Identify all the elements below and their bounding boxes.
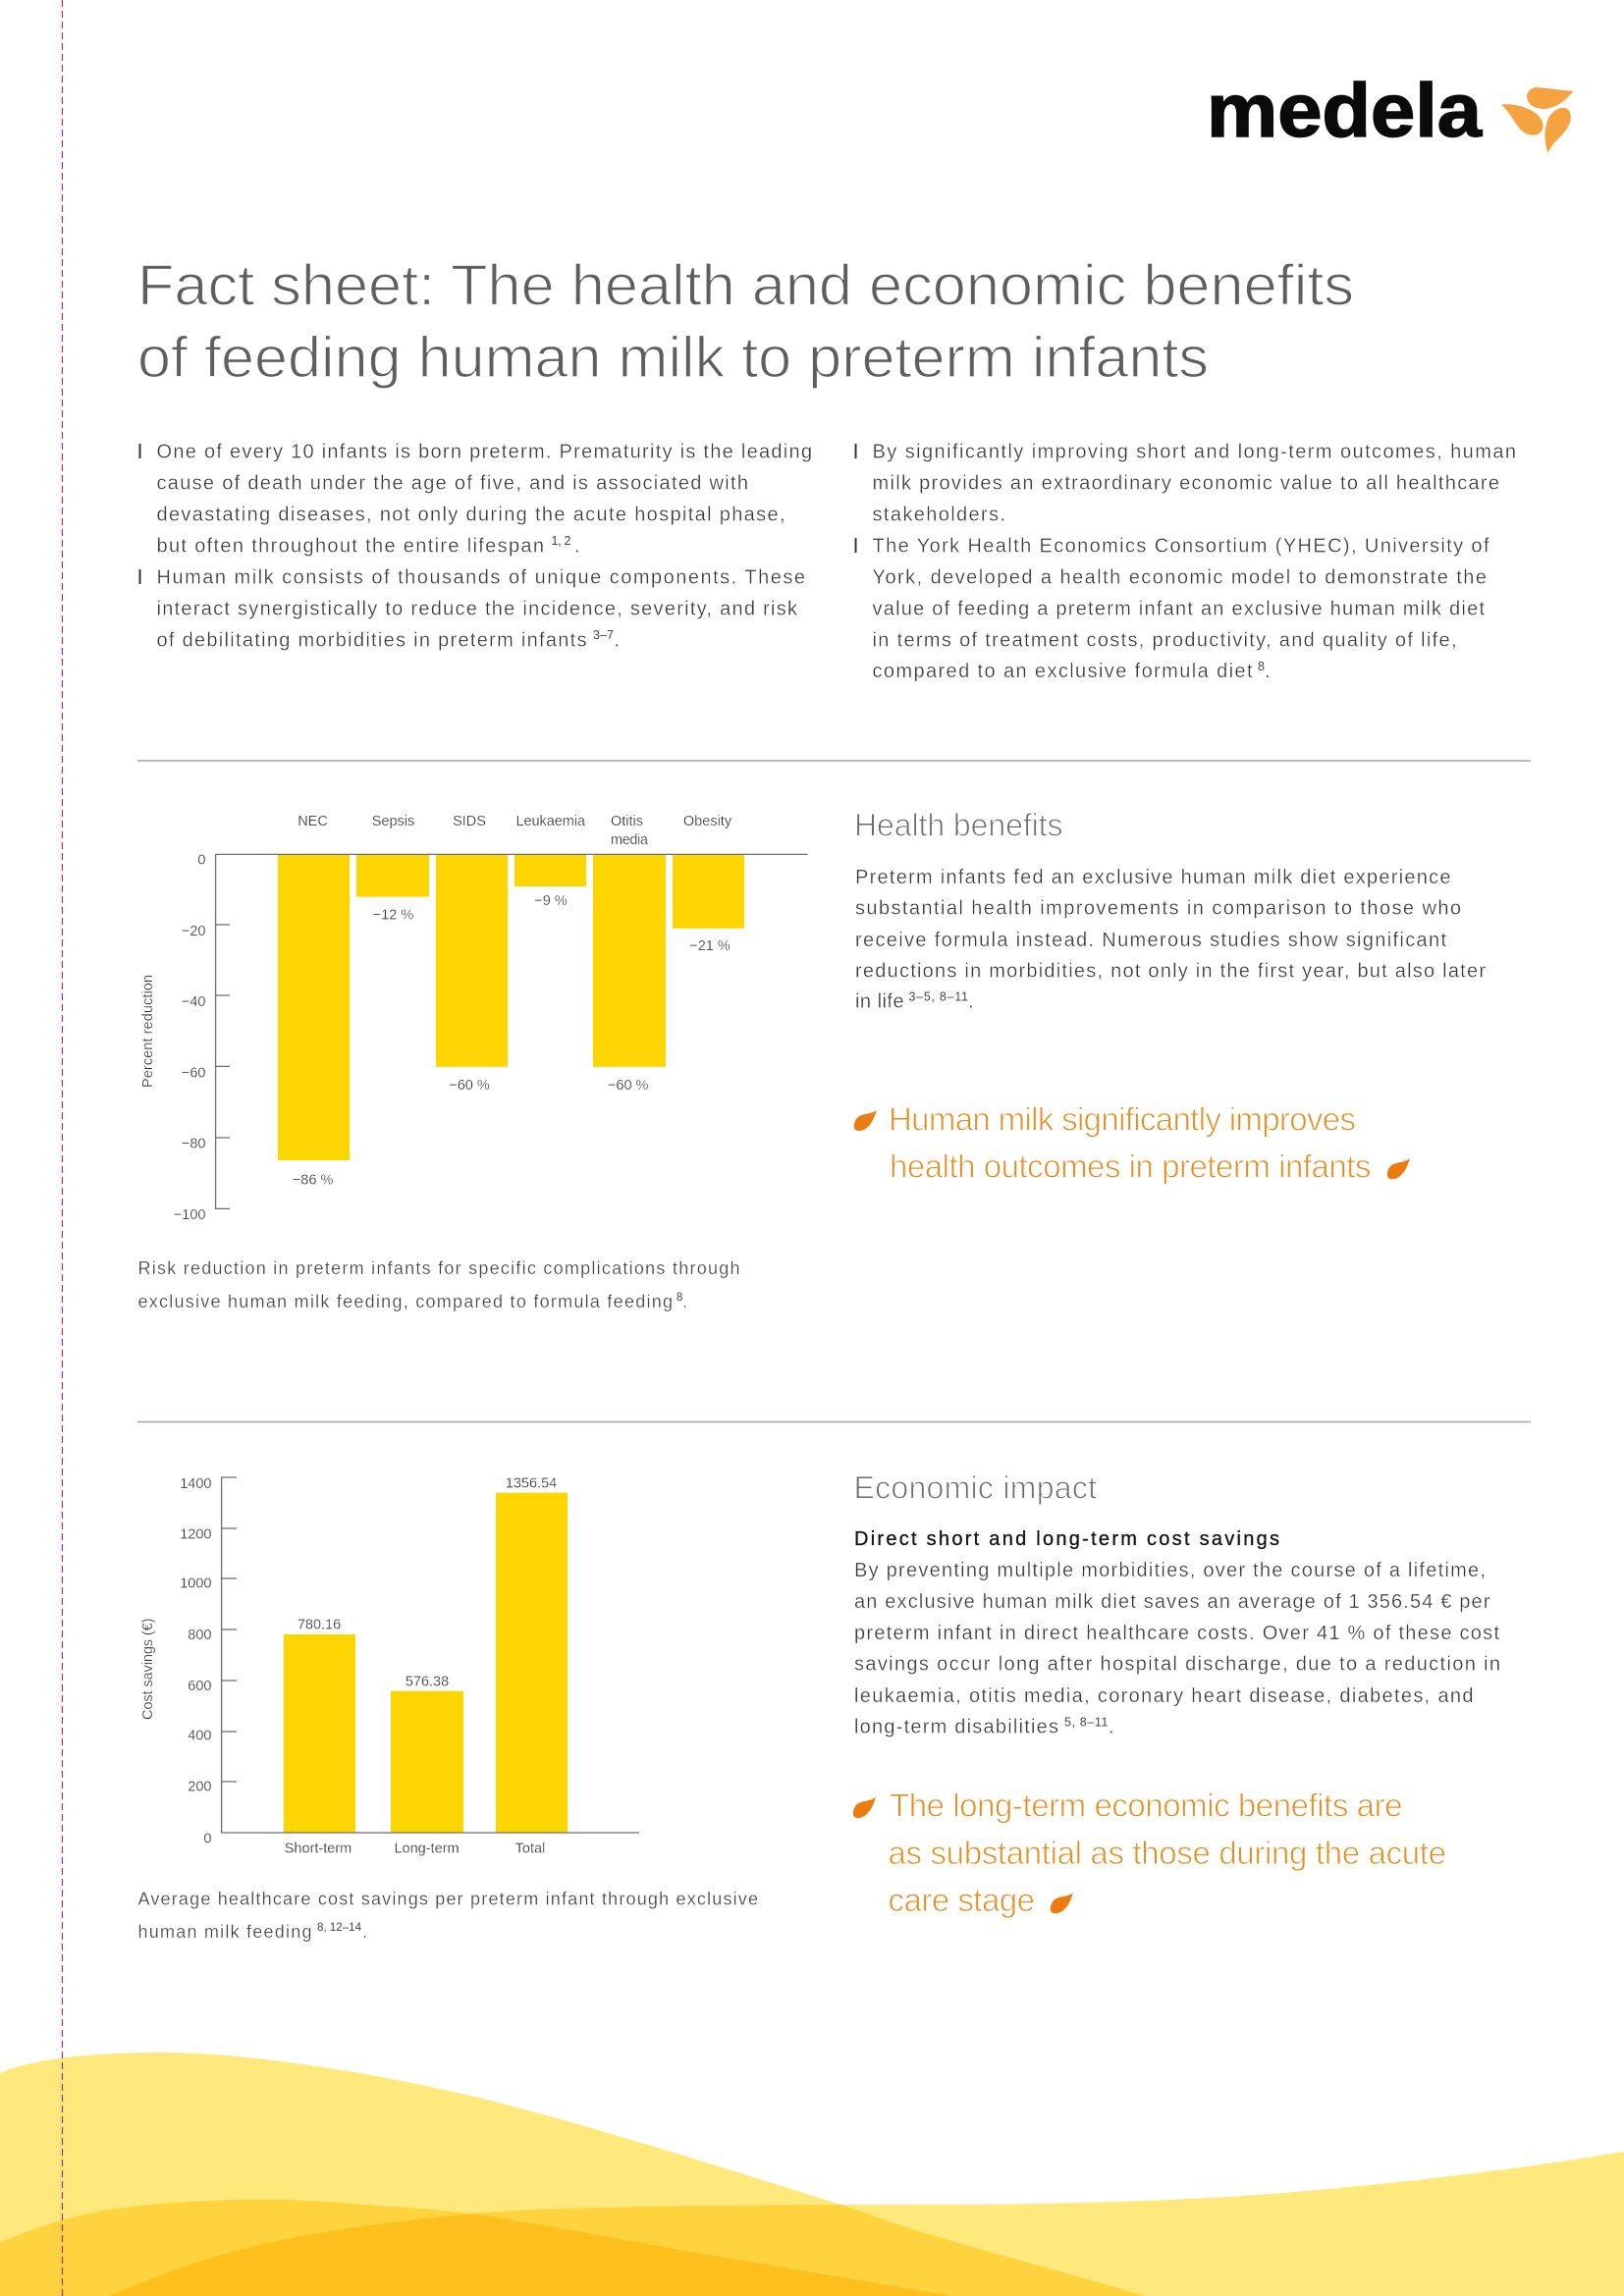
intro text: left column: 1, 2 [552,534,571,548]
chart caption: risk reduction: 8 [677,1292,682,1304]
icon: leaf [1051,1893,1073,1913]
y axis title: Cost savings (€) [140,1618,156,1720]
intro text: left column: but often throughout the entire lifespan [157,536,544,558]
category labels: Leukaemia [516,814,586,829]
category labels: Sepsis [372,814,414,829]
y axis labels: −80 [182,1137,206,1152]
value labels: −60 % [608,1078,649,1094]
y axis labels: 800 [188,1628,212,1643]
intro text: left column: devastating diseases, not only during the acute hospital phase, [157,505,785,526]
category labels [285,1841,545,1856]
text: health benefits [855,867,1486,1013]
y axis labels: 600 [188,1679,212,1694]
chart caption: cost savings: . [362,1922,367,1942]
y axis labels: −100 [174,1207,206,1223]
callout: human milk improves outcomes [854,1101,1410,1184]
category labels: media [611,832,649,848]
text: economic impact: long-term disabilities [854,1717,1058,1738]
bars: percent reduction per condition [278,854,744,1160]
intro text: left column [139,442,812,651]
category labels: Short-term [285,1841,352,1856]
value labels: −9 % [534,893,568,909]
bars: cost savings [284,1493,568,1833]
text: health benefits: substantial health improvements in comparison to those who [855,898,1461,920]
text: economic impact: leukaemia, otitis media, coronary heart disease, diabetes, and [854,1685,1473,1707]
callout: long-term economic benefits: care stage [888,1882,1035,1918]
intro text: right column: 8 [1258,660,1265,673]
category labels [298,814,732,848]
chart caption: risk reduction: exclusive human milk feeding, compared to formula feeding [137,1292,673,1311]
text: economic impact: savings occur long after hospital discharge, due to a reduction in [854,1654,1500,1676]
chart caption: cost savings [137,1890,758,1942]
intro text: left column: interact synergistically to reduce the incidence, severity, and risk [157,599,798,620]
value labels: −21 % [689,938,731,954]
value labels: 780.16 [298,1617,341,1632]
text: economic impact: . [1109,1717,1114,1738]
y axis labels: 1000 [180,1576,212,1592]
value labels: −60 % [449,1078,490,1094]
logo: medela: medela [1207,69,1483,153]
y axis labels: −60 [182,1066,206,1082]
intro text: right column: . [1265,661,1271,682]
intro text: left column: Human milk consists of thousands of unique components. These [157,567,805,589]
text: health benefits: . [968,991,974,1013]
text: health benefits: receive formula instead. Numerous studies show significant [855,930,1446,951]
value labels [293,893,731,1188]
intro text: left column: . [615,629,620,651]
y axis labels: 1200 [180,1526,212,1542]
text: economic impact: preterm infant in direct healthcare costs. Over 41 % of these cost [854,1623,1499,1644]
intro text: right column: York, developed a health economic model to demonstrate the [872,567,1487,589]
intro text: right column: compared to an exclusive formula diet [872,661,1253,682]
text: economic impact [854,1528,1500,1738]
chart caption: cost savings: Average healthcare cost savings per preterm infant through exclusive [137,1890,758,1909]
y axis labels: 0 [197,853,206,869]
callout: human milk improves outcomes: health outcomes in preterm infants [890,1148,1371,1184]
chart caption: cost savings: human milk feeding [137,1922,312,1942]
intro text: right column: value of feeding a preterm infant an exclusive human milk diet [872,599,1485,620]
background: yellow waves [0,2053,1624,2296]
callout: human milk improves outcomes: Human milk significantly improves [889,1101,1356,1138]
text: health benefits: in life [855,991,904,1013]
icon: leaf [854,1110,877,1131]
y axis labels: 400 [188,1729,212,1744]
text: economic impact: an exclusive human milk diet saves an average of 1 356.54 € per [854,1591,1490,1613]
text: economic impact: 5, 8–11 [1064,1716,1109,1730]
value labels: −12 % [373,907,413,923]
callout: long-term economic benefits: as substantial as those during the acute [888,1835,1446,1871]
bar chart: cost savings [140,1475,639,1856]
category labels: Obesity [683,814,732,829]
y axis labels: −20 [182,924,206,939]
y axis labels: 0 [203,1832,212,1847]
heading: health benefits: Health benefits [854,808,1062,843]
heading: economic impact: Economic impact [854,1470,1097,1506]
category labels: Otitis [611,814,643,829]
intro text: right column: stakeholders. [872,505,1005,526]
value labels: 576.38 [406,1674,449,1689]
category labels: Long-term [394,1841,460,1856]
intro text: left column: . [574,536,580,558]
value labels: 1356.54 [506,1475,557,1491]
value labels: −86 % [293,1172,333,1188]
chart caption: cost savings: 8, 12–14 [317,1922,362,1934]
intro text: left column: One of every 10 infants is born preterm. Prematurity is the leading [157,442,812,463]
intro text: right column: The York Health Economics Consortium (YHEC), University of [872,536,1489,558]
title: of feeding human milk to preterm infants [137,326,1209,390]
intro text: left column: cause of death under the age of five, and is associated with [157,473,748,495]
text: health benefits: 3–5, 8–11 [909,989,968,1003]
category labels: Total [515,1841,545,1856]
title [137,253,1354,390]
chart caption: risk reduction [137,1258,740,1311]
intro text: left column: 3–7 [593,628,614,642]
callout: long-term economic benefits [853,1788,1446,1918]
text: economic impact: By preventing multiple morbidities, over the course of a lifetime, [854,1560,1486,1581]
bar chart: risk reduction [140,814,807,1223]
category labels: NEC [298,814,328,829]
chart caption: risk reduction: . [682,1292,687,1311]
intro text: right column: By significantly improving short and long-term outcomes, human [872,442,1516,463]
y axis labels [174,853,206,1223]
intro text: right column: milk provides an extraordinary economic value to all healthcare [872,473,1499,495]
subheading: Direct short and long-term cost savings [854,1528,1279,1550]
y axis labels: 200 [188,1779,212,1794]
y axis labels: −40 [182,994,206,1010]
icon: leaf [1387,1158,1410,1179]
value labels [298,1475,557,1689]
axes [222,1477,639,1833]
intro text: left column: of debilitating morbidities in preterm infants [157,629,587,651]
intro text: right column [854,442,1516,682]
title: Fact sheet: The health and economic benefits [137,253,1354,318]
y axis title: Percent reduction [140,975,156,1088]
chart caption: risk reduction: Risk reduction in preterm infants for specific complications through [137,1258,740,1278]
category labels: SIDS [453,814,486,829]
icon: leaf [853,1797,876,1818]
axes [216,854,808,1208]
y axis labels: 1400 [180,1476,212,1492]
text: health benefits: Preterm infants fed an exclusive human milk diet experience [855,867,1451,888]
text: health benefits: reductions in morbidities, not only in the first year, but also later [855,961,1486,983]
callout: long-term economic benefits: The long-term economic benefits are [890,1788,1402,1824]
y axis labels [180,1476,212,1847]
intro text: right column: in terms of treatment costs, productivity, and quality of life, [872,629,1457,651]
